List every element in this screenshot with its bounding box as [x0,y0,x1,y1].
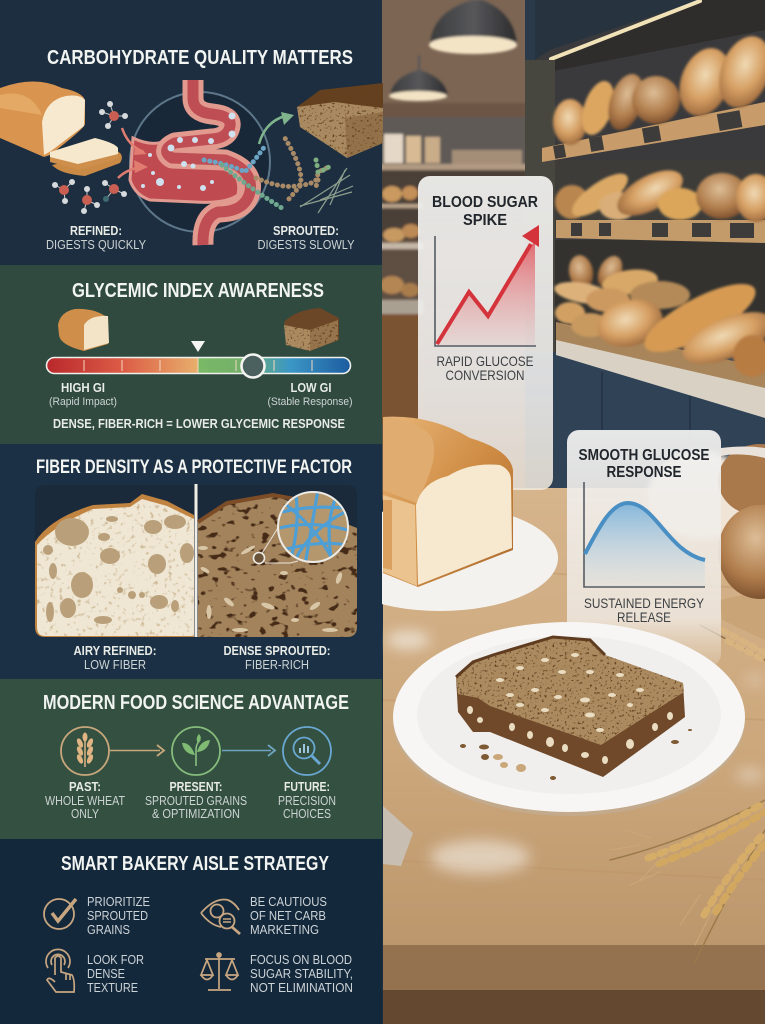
shelf planks [542,102,765,440]
panel heading: BLOOD SUGAR [432,194,538,211]
label: airy refined [74,643,156,672]
label: past: PAST: [69,779,101,794]
label: refined: REFINED: [70,223,122,238]
sprouted bread slice [456,637,685,777]
wheat stalks [610,800,765,962]
label: high gi: (Rapid Impact) [49,396,117,408]
panel: glycemic index [0,265,382,444]
loaves, lower shelf [553,252,765,377]
white sandwich loaf [383,417,513,587]
label: past: ONLY [71,806,99,821]
text: prioritize: SPROUTED [87,908,148,923]
text: dense texture: LOOK FOR [87,952,144,967]
panel caption: CONVERSION [446,367,524,383]
icon: magnifier circle [283,727,331,775]
label: sprouted: SPROUTED: [273,223,339,238]
icon: refined molecules [52,101,128,214]
spike line chart [435,225,539,346]
dense sprouted crumb [198,495,357,637]
panel: fiber density [35,444,382,669]
white plate [393,622,745,816]
marker triangle [191,341,205,352]
label: dense sprouted: FIBER-RICH [245,657,309,672]
heading: glycemic index: GLYCEMIC INDEX AWARENESS [72,280,324,302]
price labels [553,110,754,238]
label: low gi [268,380,352,408]
icon: small sprouted loaf [284,308,339,351]
back right loaves on board [648,444,765,640]
text: prioritize: PRIORITIZE [87,894,150,909]
panel: modern food science [0,679,382,839]
heading: modern food science: MODERN FOOD SCIENCE ADVANTAGE [43,692,349,714]
label: sprouted [258,223,355,252]
arrow: slow release to sprouted [259,112,294,144]
plate under white loaf [322,505,558,611]
panel caption [584,595,705,625]
panel caption: RELEASE [617,609,671,625]
panel caption [436,353,534,383]
slow release chains [204,135,330,210]
text: net carb [250,894,327,937]
panel: carbohydrate quality [0,0,383,265]
arrow: present to future [222,745,275,756]
text: prioritize [87,894,150,937]
divider [194,484,198,637]
label: present: SPROUTED GRAINS [145,793,247,808]
loaves, top shelf [553,29,765,145]
text: dense texture [87,952,144,995]
panel caption: RAPID GLUCOSE [436,353,534,369]
label: high gi [49,380,117,408]
label: airy refined: LOW FIBER [84,657,146,672]
text: dense texture: TEXTURE [87,980,138,995]
icon: check circle [44,899,76,929]
arrow: refined into gut [118,128,148,178]
label: past [45,779,125,821]
smooth glucose response panel [567,430,721,666]
panel caption: SUSTAINED ENERGY [584,595,705,611]
label: future: CHOICES [283,806,331,821]
bakery photo background [322,0,765,1024]
wheat behind panel [700,625,765,661]
label: low gi: (Stable Response) [268,396,352,408]
label: future [278,779,336,821]
label: present: & OPTIMIZATION [152,806,240,821]
label: future: FUTURE: [284,779,330,794]
label: dense sprouted [224,643,330,672]
panel heading [578,447,710,481]
slider knob [242,354,264,378]
wooden table [383,488,765,1024]
blood sugar spike panel [418,176,553,490]
seeds [467,653,673,764]
icon: sprouted loaf [297,83,383,158]
arrow: past to present [110,745,164,756]
label: present: PRESENT: [170,779,222,794]
heading: smart bakery: SMART BAKERY AISLE STRATEGY [61,853,330,875]
label: low gi: LOW GI [290,380,332,395]
icon: small white loaf [58,309,109,351]
label: refined [46,223,146,252]
text: dense texture: DENSE [87,966,125,981]
label: future: PRECISION [278,793,336,808]
label: sprouted: DIGESTS SLOWLY [258,237,355,252]
loaves, middle shelf [555,161,765,225]
label: high gi: HIGH GI [61,380,105,395]
text: net carb: OF NET CARB [250,908,326,923]
gi scale bar [46,354,350,378]
text: blood sugar stability: FOCUS ON BLOOD [250,952,352,967]
icon: pointing hand [46,949,74,992]
icon: eye with magnifier [201,900,240,934]
flour dusting [386,631,765,874]
nutrient particles [141,112,236,191]
icon: balance scales [201,953,238,990]
air pockets [43,515,194,624]
label: refined: DIGESTS QUICKLY [46,237,146,252]
wall and shelves, far background [378,0,528,500]
label: dense sprouted: DENSE SPROUTED: [224,643,330,658]
magnifier callout [254,490,348,565]
label: airy refined: AIRY REFINED: [74,643,156,658]
label: past: WHOLE WHEAT [45,793,125,808]
diagram: digestive tract in circle [130,80,353,245]
fiber strands [300,168,353,213]
pendant lamps [389,0,517,101]
bread comparison image [35,484,357,637]
airy refined crumb [35,494,194,637]
icon: sprout circle [172,727,220,775]
panel heading: RESPONSE [606,464,682,481]
text: blood sugar stability [250,952,353,995]
heading: fiber density: FIBER DENSITY AS A PROTECTIVE FACTOR [36,457,352,478]
panel heading: SPIKE [463,212,507,229]
crumbs [460,729,692,780]
linen cloth [383,806,413,866]
text: net carb: BE CAUTIOUS [250,894,327,909]
heading: carbohydrate quality: CARBOHYDRATE QUALITY MATTERS [47,47,353,69]
icon: white loaf with slices [0,82,122,176]
text: blood sugar stability: SUGAR STABILITY, [250,966,353,981]
text: blood sugar stability: NOT ELIMINATION [250,980,353,995]
panel heading: SMOOTH GLUCOSE [578,447,710,464]
label: present [145,779,247,821]
callout: gi summary: DENSE, FIBER-RICH = LOWER GLYCEMIC RESPONSE [53,416,345,431]
bread shelving unit [525,0,765,500]
text: net carb: MARKETING [250,922,319,937]
bell curve chart [584,482,705,587]
panel: smart bakery strategy [0,839,382,1024]
panel heading [432,194,538,229]
icon: wheat circle [61,727,109,775]
text: prioritize: GRAINS [87,922,130,937]
